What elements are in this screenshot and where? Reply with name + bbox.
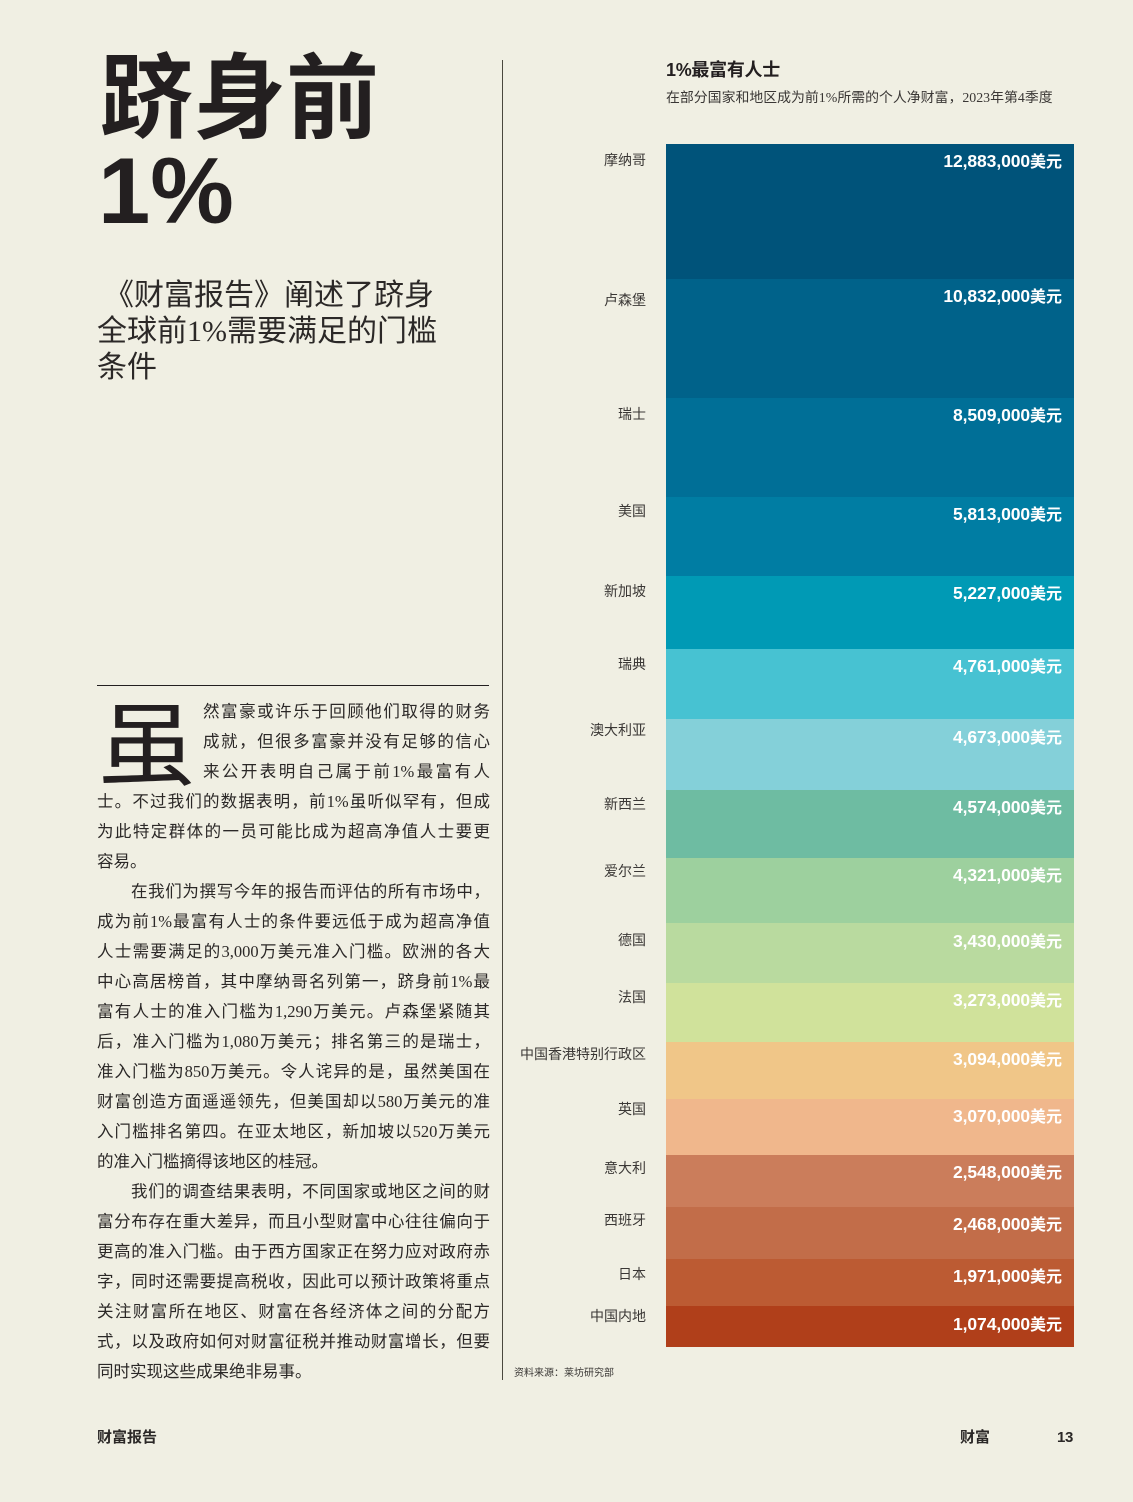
- article body text: 更高的准入门槛。由于西方国家正在努力应对政府赤: [97, 1242, 490, 1261]
- footer: section name: 财富报告: [97, 1429, 157, 1446]
- country labels: 法国: [618, 989, 646, 1005]
- band: Singapore: [666, 576, 1074, 649]
- band: New Zealand: 4,574,000美元: [953, 797, 1062, 817]
- band: Mainland China: [666, 1306, 1074, 1347]
- body rule: [97, 685, 489, 686]
- band: Sweden: 4,761,000美元: [953, 656, 1062, 676]
- band: Hong Kong: 3,094,000美元: [953, 1049, 1062, 1069]
- subtitle: 《财富报告》阐述了跻身: [104, 279, 434, 312]
- country labels: 新西兰: [604, 796, 646, 812]
- band: Switzerland: [666, 398, 1074, 497]
- article body text: 入门槛排名第四。在亚太地区，新加坡以520万美元: [97, 1122, 490, 1141]
- country labels: 爱尔兰: [604, 863, 646, 879]
- country labels: 中国内地: [590, 1308, 646, 1324]
- band: United States: [666, 497, 1074, 576]
- article body text: 来公开表明自己属于前1%最富有人: [203, 762, 490, 781]
- country labels: 瑞士: [618, 406, 646, 422]
- band: Hong Kong: [666, 1042, 1074, 1099]
- article body text: 容易。: [97, 852, 146, 871]
- article body text: 在我们为撰写今年的报告而评估的所有市场中，: [131, 882, 490, 901]
- band: Monaco: [666, 144, 1074, 279]
- article body text: 字，同时还需要提高税收，因此可以预计政策将重点: [97, 1272, 490, 1291]
- country labels: 美国: [618, 503, 646, 519]
- country labels: 摩纳哥: [604, 152, 646, 168]
- article body text: 关注财富所在地区、财富在各经济体之间的分配方: [97, 1302, 490, 1321]
- band: Germany: 3,430,000美元: [953, 931, 1062, 951]
- country labels: 中国香港特别行政区: [520, 1046, 646, 1062]
- band: Spain: [666, 1207, 1074, 1259]
- country labels: 西班牙: [604, 1212, 646, 1228]
- band: United Kingdom: [666, 1099, 1074, 1155]
- band: New Zealand: [666, 790, 1074, 858]
- band: Ireland: [666, 858, 1074, 923]
- band: France: [666, 983, 1074, 1042]
- band: Luxembourg: 10,832,000美元: [943, 286, 1062, 306]
- article body text: 富分布存在重大差异，而且小型财富中心往往偏向于: [97, 1212, 490, 1231]
- band: Germany: [666, 923, 1074, 983]
- chart heading: 1%最富有人士: [666, 60, 780, 80]
- band: Australia: 4,673,000美元: [953, 727, 1062, 747]
- article body text: 富有人士的准入门槛为1,290万美元。卢森堡紧随其: [97, 1002, 490, 1021]
- band: Switzerland: 8,509,000美元: [953, 405, 1062, 425]
- band: Italy: 2,548,000美元: [953, 1162, 1062, 1182]
- subtitle: [97, 279, 437, 384]
- article body text: 为此特定群体的一员可能比成为超高净值人士要更: [97, 822, 490, 841]
- band: Australia: [666, 719, 1074, 790]
- country labels: 澳大利亚: [590, 722, 646, 738]
- chart heading: [666, 60, 1053, 106]
- article body text: 准入门槛为850万美元。令人诧异的是，虽然美国在: [97, 1062, 490, 1081]
- title: [98, 23, 379, 243]
- article body text: 然富豪或许乐于回顾他们取得的财务: [203, 702, 490, 721]
- subtitle: 条件: [97, 351, 157, 384]
- band: Japan: [666, 1259, 1074, 1306]
- article body text: [97, 702, 490, 1381]
- drop cap: 虽: [98, 673, 196, 805]
- country labels: 新加坡: [604, 583, 646, 599]
- band: United States: 5,813,000美元: [953, 504, 1062, 524]
- title: 1%: [98, 138, 234, 243]
- band: Luxembourg: [666, 279, 1074, 398]
- country labels: 意大利: [604, 1160, 646, 1176]
- article body text: 士。不过我们的数据表明，前1%虽听似罕有，但成: [97, 792, 490, 811]
- article body text: 中心高居榜首，其中摩纳哥名列第一，跻身前1%最: [97, 972, 490, 991]
- country labels: [520, 152, 646, 1324]
- article body text: 成为前1%最富有人士的条件要远低于成为超高净值: [97, 912, 490, 931]
- band: Sweden: [666, 649, 1074, 719]
- chart heading: 在部分国家和地区成为前1%所需的个人净财富，2023年第4季度: [666, 91, 1053, 106]
- country labels: 卢森堡: [604, 292, 646, 308]
- source note: 资料来源：莱坊研究部: [514, 1368, 614, 1379]
- subtitle: 全球前1%需要满足的门槛: [97, 315, 437, 348]
- country labels: 日本: [618, 1266, 646, 1282]
- article body text: 后，准入门槛为1,080万美元；排名第三的是瑞士，: [97, 1032, 490, 1051]
- band: Italy: [666, 1155, 1074, 1207]
- article body text: 成就，但很多富豪并没有足够的信心: [203, 732, 490, 751]
- band: Spain: 2,468,000美元: [953, 1214, 1062, 1234]
- article body text: 我们的调查结果表明，不同国家或地区之间的财: [131, 1182, 490, 1201]
- band: Japan: 1,971,000美元: [953, 1266, 1062, 1286]
- country labels: 英国: [618, 1101, 646, 1117]
- article body text: 人士需要满足的3,000万美元准入门槛。欧洲的各大: [97, 942, 490, 961]
- title: 跻身前: [100, 23, 379, 158]
- band: Singapore: 5,227,000美元: [953, 583, 1062, 603]
- article body text: 的准入门槛摘得该地区的桂冠。: [97, 1152, 328, 1171]
- band: United Kingdom: 3,070,000美元: [953, 1106, 1062, 1126]
- country labels: 瑞典: [618, 656, 646, 672]
- band: Mainland China: 1,074,000美元: [953, 1314, 1062, 1334]
- band: France: 3,273,000美元: [953, 990, 1062, 1010]
- footer: publication name: 财富: [960, 1429, 990, 1446]
- column divider: [502, 60, 503, 1380]
- article body text: 式，以及政府如何对财富征税并推动财富增长，但要: [97, 1332, 490, 1351]
- article body text: 同时实现这些成果绝非易事。: [97, 1362, 312, 1381]
- band: Monaco: 12,883,000美元: [943, 151, 1062, 171]
- country labels: 德国: [618, 932, 646, 948]
- article body text: 财富创造方面遥遥领先，但美国却以580万美元的准: [97, 1092, 490, 1111]
- band: Ireland: 4,321,000美元: [953, 865, 1062, 885]
- footer: page number: 13: [1057, 1429, 1073, 1446]
